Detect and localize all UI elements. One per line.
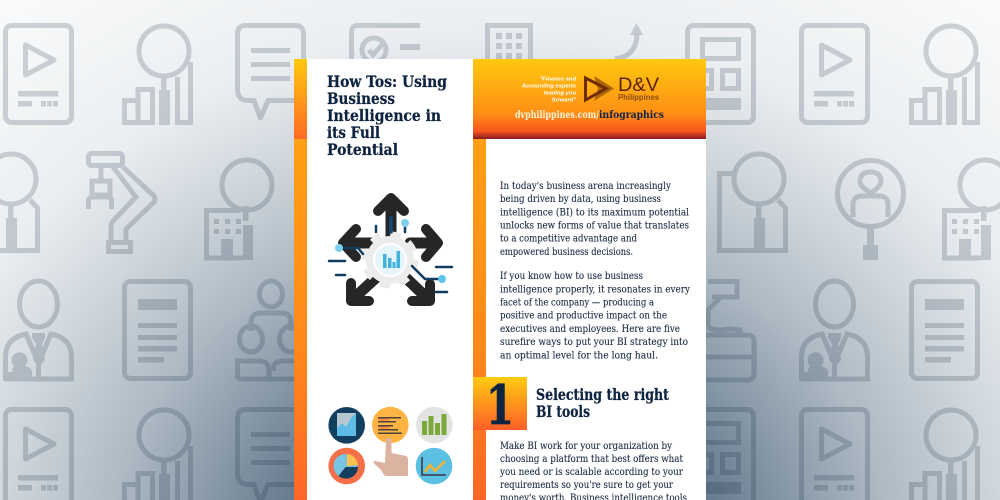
website url: infographics xyxy=(599,109,664,121)
text block: introduction: In today's business arena increasingly xyxy=(500,181,671,192)
title: Business xyxy=(327,89,395,108)
text block: introduction: facet of the company — producing a xyxy=(500,298,654,308)
icon: pie chart xyxy=(328,448,365,484)
logo mark xyxy=(586,76,614,101)
text block: section 1 body: choosing a platform that best offers what xyxy=(500,454,683,465)
website url: dvphilippines.com/ xyxy=(515,109,599,121)
number badge 1 xyxy=(473,373,527,437)
tagline: "Finance and xyxy=(539,76,576,82)
text block: section 1 body: Make BI work for your organization by xyxy=(500,441,672,452)
text block: introduction: being driven by data, using business xyxy=(500,194,661,205)
text block: introduction: empowered business decisions. xyxy=(500,247,633,258)
icon: area chart xyxy=(328,407,365,444)
text block: section 1 body xyxy=(499,441,687,500)
heading: selecting the right BI tools xyxy=(536,385,670,421)
text block: section 1 body: you need or is scalable according to your xyxy=(499,467,683,478)
text block: introduction: intelligence properly, it resonates in every xyxy=(500,284,690,295)
title: Potential xyxy=(327,140,398,159)
text block: introduction: executives and employees. Here are five xyxy=(500,324,680,335)
illustration: gear with arrows xyxy=(329,198,452,301)
icon: green bars xyxy=(416,407,453,443)
tagline: leading you xyxy=(544,90,576,96)
illustration: chart icons with hand xyxy=(328,407,453,484)
text block: introduction: intelligence (BI) to its maximum potential xyxy=(500,207,689,218)
heading: selecting the right BI tools: BI tools xyxy=(536,402,590,421)
icon: pointing hand xyxy=(373,438,408,476)
icon: line chart xyxy=(416,448,452,484)
tagline xyxy=(521,76,577,104)
text block: introduction: to a competitive advantage and xyxy=(500,234,638,245)
text block: introduction: surefire ways to put your BI strategy into xyxy=(500,337,688,348)
title xyxy=(327,72,447,159)
text block: introduction: positive and productive impact on the xyxy=(500,311,667,322)
text block: section 1 body: requirements so you're sure to get your xyxy=(500,480,673,491)
number badge 1: 1 xyxy=(486,373,514,437)
gear xyxy=(366,236,414,284)
title: Intelligence in xyxy=(327,106,441,125)
title: its Full xyxy=(327,123,380,142)
text block: introduction: unlocks new forms of value that translates xyxy=(500,220,689,232)
icon: bar list xyxy=(372,407,409,443)
logo wordmark: D&V xyxy=(618,74,659,96)
text block: introduction xyxy=(500,181,690,361)
header band xyxy=(473,59,706,139)
arrows xyxy=(343,198,438,301)
heading: selecting the right BI tools: Selecting the right xyxy=(536,385,670,404)
tagline: forward" xyxy=(552,98,576,104)
logo wordmark: Philippines xyxy=(618,93,660,102)
panel: infographic page xyxy=(294,59,706,500)
circuit lines and dots xyxy=(329,218,452,292)
text block: introduction: an optimal level for the long haul. xyxy=(500,350,658,361)
text block: introduction: If you know how to use business xyxy=(500,271,643,282)
tagline: Accounting experts xyxy=(521,84,577,90)
title: How Tos: Using xyxy=(327,72,447,91)
